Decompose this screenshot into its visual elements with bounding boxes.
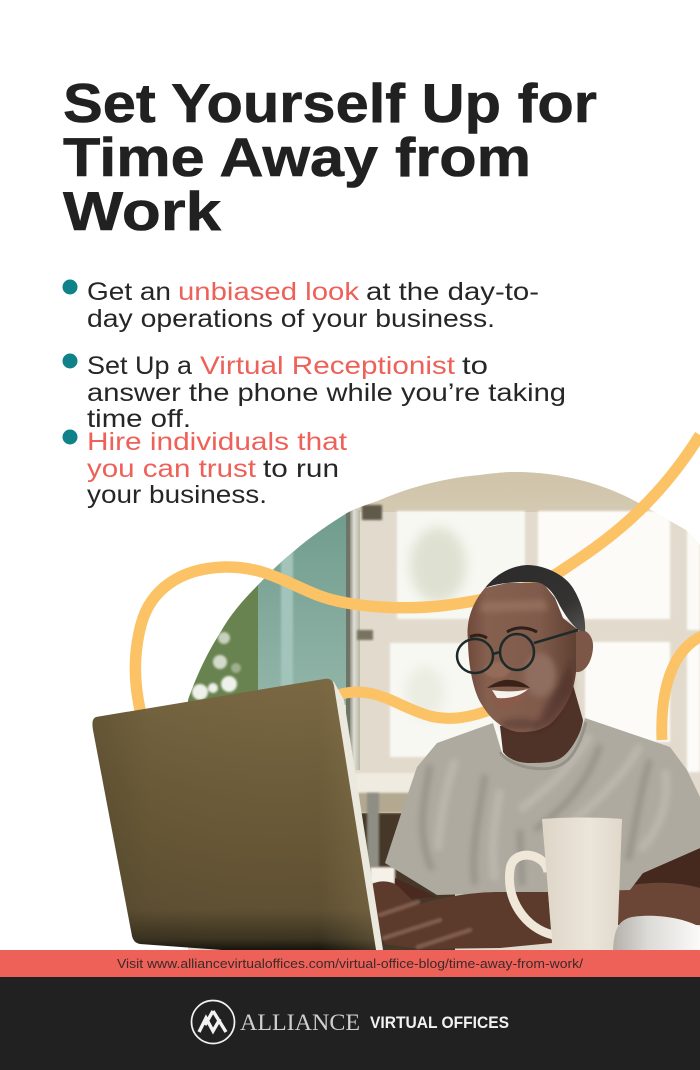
logo tagline: VIRTUAL OFFICES (370, 1014, 509, 1032)
bullet: hire individuals: to run (263, 455, 339, 483)
logo wordmark: ALLIANCE (240, 1010, 360, 1035)
bullet: virtual receptionist: Virtual Receptionist (200, 352, 455, 380)
footer: link bar (0, 950, 700, 977)
moustache (487, 680, 530, 688)
bullet: virtual receptionist: to (462, 352, 488, 380)
bullet: unbiased look: Get an (87, 278, 171, 306)
title: Time Away from (63, 126, 531, 188)
lower lip and chin (490, 691, 528, 708)
bullet: unbiased look: at the day-to- (366, 278, 539, 306)
man (372, 565, 700, 949)
face light and shadow (480, 600, 572, 732)
head (468, 583, 578, 732)
bullet: hire individuals: you can trust (87, 455, 256, 483)
bullet: hire individuals (62, 428, 347, 509)
bullet: hire individuals: Hire individuals that (87, 428, 347, 456)
footer: dark band with logo (0, 977, 700, 1070)
hand on keyboard (372, 881, 552, 949)
right arm (617, 848, 700, 925)
left arm under sleeve (395, 878, 437, 900)
bullet: virtual receptionist (62, 352, 566, 433)
bullet: virtual receptionist: answer the phone while you’re taking (87, 379, 566, 407)
coffee mug (509, 818, 622, 950)
logo mark (192, 1000, 234, 1044)
teeth (492, 689, 528, 698)
eyebrows (470, 628, 537, 638)
t-shirt (385, 718, 700, 895)
yellow wave: middle ribbon (338, 692, 495, 718)
ear (576, 630, 593, 672)
glasses (457, 630, 578, 673)
glass on table (613, 916, 700, 950)
shirt folds (422, 735, 666, 885)
photo background: window and wall (180, 470, 700, 950)
footer: link bar: Visit www.alliancevirtualoffices.com/virtual-office-blog/time-away-from-work/ (117, 957, 584, 971)
hair (485, 565, 585, 632)
bullet: unbiased look (62, 278, 539, 333)
t-shirt collar (500, 722, 586, 769)
yellow wave: long ribbon (135, 435, 700, 714)
title: Set Yourself Up for (63, 72, 597, 134)
nose (484, 662, 510, 678)
title: Work (63, 180, 221, 242)
neck (500, 685, 583, 765)
bullet: unbiased look: day operations of your business. (87, 305, 495, 333)
laptop (92, 679, 383, 950)
bullet: hire individuals: your business. (87, 481, 267, 509)
bullet: virtual receptionist: time off. (87, 405, 191, 433)
title (63, 72, 597, 242)
yellow wave: right ribbon (662, 636, 700, 740)
bullet: virtual receptionist: Set Up a (87, 352, 192, 380)
bullet: unbiased look: unbiased look (178, 278, 360, 306)
